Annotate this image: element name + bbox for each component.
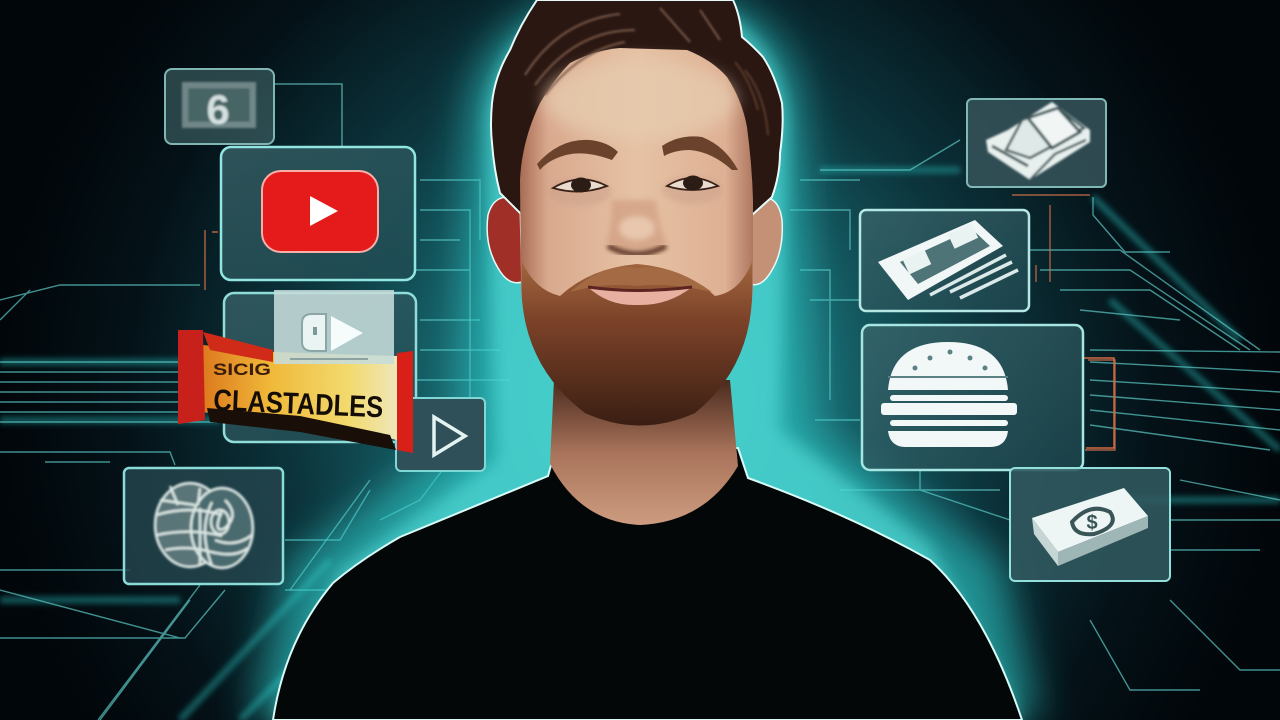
eye sockets [548, 178, 612, 206]
icon: wrapped bundle [155, 483, 253, 568]
circuit glow bands [0, 170, 1280, 720]
panel: bottom-right money card [1010, 468, 1170, 581]
panel: YouTube [221, 147, 415, 280]
panel: lower-left video card [224, 293, 416, 442]
lips [588, 287, 692, 305]
person [273, 0, 1022, 720]
icon: blurred number six: 6 [206, 86, 230, 133]
icon: banknotes [878, 220, 1018, 300]
hair highlights [525, 8, 768, 135]
hair [491, 0, 783, 215]
panel: translucent play card [274, 290, 394, 364]
icon: play outline [434, 417, 465, 455]
circuit lines: right [790, 140, 1280, 690]
glow behind figure [250, 0, 1040, 720]
icon: tagged play arrow [290, 314, 368, 360]
panel: small play card [396, 398, 485, 471]
face [520, 48, 753, 422]
right ear [750, 198, 782, 285]
panel: small top-left number card [165, 69, 342, 146]
beard [522, 262, 752, 426]
candy bar wrapper [178, 330, 413, 453]
circuit lines: left [0, 180, 510, 720]
forehead light [545, 60, 735, 140]
label: candy bar text: SICIG [213, 360, 271, 379]
eyebrows [537, 140, 618, 170]
mustache [570, 267, 712, 292]
left eye [553, 178, 607, 192]
neck [550, 380, 738, 525]
shirt [273, 448, 1022, 720]
icon: cash stack [986, 102, 1090, 180]
icon: money brick [1032, 488, 1148, 566]
icon: burger [881, 342, 1017, 447]
panel: bundle card [124, 468, 283, 584]
right eye [667, 176, 718, 190]
icon: YouTube play button [262, 171, 378, 252]
panel: right money card [860, 210, 1029, 311]
label: candy bar name: CLASTADLES [213, 384, 384, 424]
label: dollar sign: $ [1086, 512, 1098, 534]
panel: top-right money card [967, 99, 1106, 187]
nose [606, 200, 668, 253]
icon: blurred number six [182, 82, 256, 133]
panel: burger card [862, 325, 1114, 470]
left ear [487, 197, 522, 283]
